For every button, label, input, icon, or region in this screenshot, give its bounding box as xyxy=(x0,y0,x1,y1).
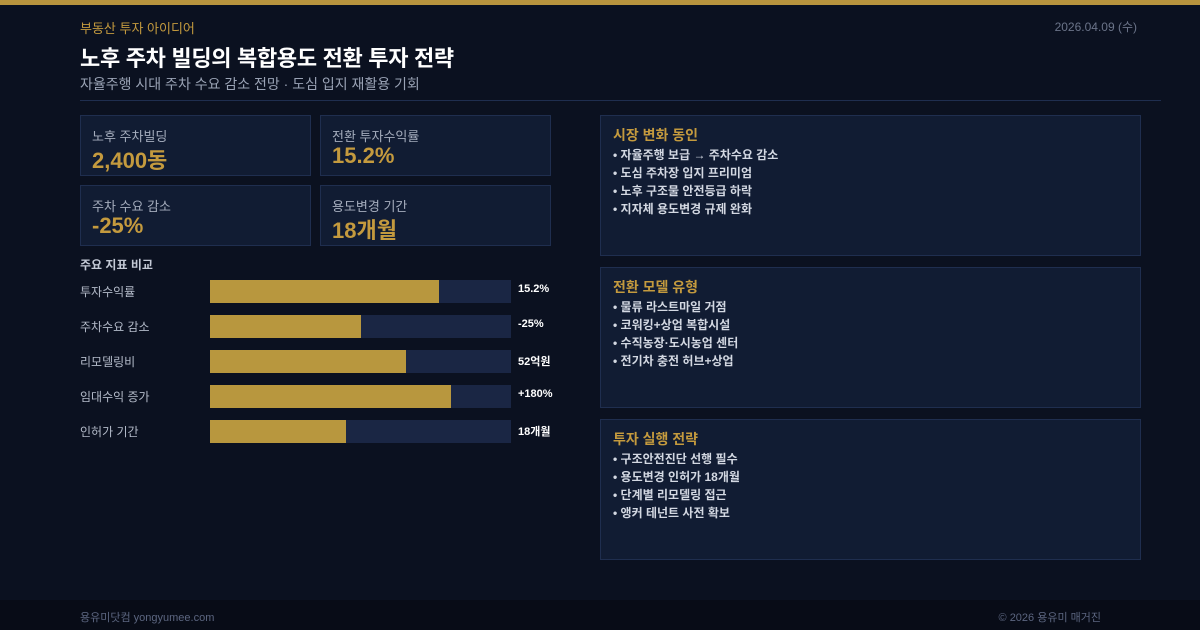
footer: 용유미닷컴 yongyumee.com xyxy=(80,612,214,624)
panel: models: • 물류 라스트마일 거점 xyxy=(613,300,727,314)
stat: demand xyxy=(80,185,311,246)
top bar xyxy=(0,0,1200,5)
stat: buildings: 2,400동 xyxy=(92,148,167,173)
panel: models xyxy=(600,267,1141,408)
panel: strategy: • 단계별 리모델링 접근 xyxy=(613,488,727,502)
kicker: 부동산 투자 아이디어 xyxy=(80,21,195,36)
stat: return: 15.2% xyxy=(332,143,394,168)
panel: models: • 코워킹+상업 복합시설 xyxy=(613,318,730,332)
panel: drivers: • 자율주행 보급 → 주차수요 감소 xyxy=(613,148,778,162)
text: 52억원 xyxy=(518,356,550,368)
panel: strategy: • 구조안전진단 선행 필수 xyxy=(613,452,738,466)
stat: period: 용도변경 기간 xyxy=(332,199,407,214)
text: 투자수익률 xyxy=(80,285,135,299)
text: 임대수익 증가 xyxy=(80,390,150,404)
text: 15.2% xyxy=(518,283,549,295)
panel: drivers: 시장 변화 동인 xyxy=(613,127,698,143)
panel: models: 전환 모델 유형 xyxy=(613,279,698,295)
panel: strategy xyxy=(600,419,1141,560)
panel: models: • 전기차 충전 허브+상업 xyxy=(613,354,734,368)
text: 리모델링비 xyxy=(80,355,135,369)
panel: models: • 수직농장·도시농업 센터 xyxy=(613,336,738,350)
stat: demand: 주차 수요 감소 xyxy=(92,199,171,214)
panel: drivers: • 노후 구조물 안전등급 하락 xyxy=(613,184,752,198)
panel: strategy: • 용도변경 인허가 18개월 xyxy=(613,470,740,484)
text: 주차수요 감소 xyxy=(80,320,150,334)
stat: return: 전환 투자수익률 xyxy=(332,129,419,144)
stat: demand: -25% xyxy=(92,213,143,238)
panel: strategy: • 앵커 테넌트 사전 확보 xyxy=(613,506,730,520)
text: 인허가 기간 xyxy=(80,425,139,439)
stat: period: 18개월 xyxy=(332,218,397,243)
footer xyxy=(0,600,1200,630)
stat: buildings xyxy=(80,115,311,176)
footer: © 2026 용유미 매거진 xyxy=(999,612,1101,624)
subtitle: 자율주행 시대 주차 수요 감소 전망 · 도심 입지 재활용 기회 xyxy=(80,76,420,92)
text: 18개월 xyxy=(518,426,550,438)
bar chart: 주요 지표 비교 xyxy=(80,258,153,272)
panel: strategy: 투자 실행 전략 xyxy=(613,431,698,447)
text: +180% xyxy=(518,388,553,400)
title: 노후 주차 빌딩의 복합용도 전환 투자 전략 xyxy=(80,46,454,71)
date: 2026.04.09 (수) xyxy=(1055,20,1137,34)
panel: drivers: • 지자체 용도변경 규제 완화 xyxy=(613,202,752,216)
text: -25% xyxy=(518,318,544,330)
panel: drivers: • 도심 주차장 입지 프리미엄 xyxy=(613,166,752,180)
stat: period xyxy=(320,185,551,246)
stat: return xyxy=(320,115,551,176)
stat: buildings: 노후 주차빌딩 xyxy=(92,129,167,144)
panel: drivers xyxy=(600,115,1141,256)
